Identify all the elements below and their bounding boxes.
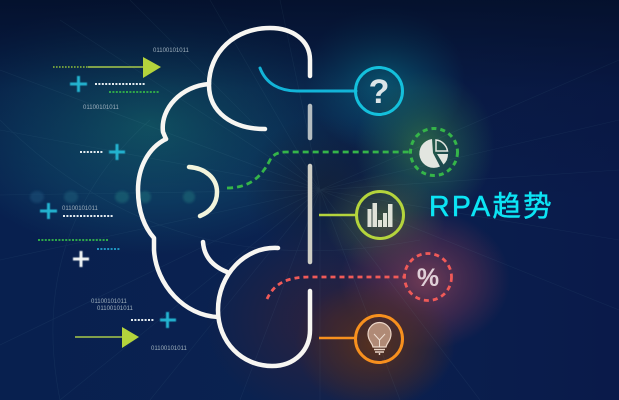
left lobe [138,139,218,317]
small connector fold [203,242,227,272]
binary number labels: 01100101011 [83,105,119,111]
inner fold [189,167,217,216]
binary number labels: 01100101011 [151,346,187,352]
center divider upper [308,106,312,138]
node: question mark: ? [369,73,389,111]
node: bar chart [356,192,404,238]
arrow: top lime [53,57,161,78]
node: light bulb [356,316,402,362]
plus signs [40,76,176,328]
binary number labels: 01100101011 [91,299,127,305]
dotted lines [38,84,160,320]
arrow: bottom lime [75,327,139,348]
node: percent: % [417,264,439,292]
binary number labels [62,48,189,352]
blurred circles row [30,191,195,203]
connector: red dashed line [267,277,404,299]
binary number labels: 01100101011 [62,206,98,212]
top lobe [209,28,310,129]
second lobe [163,84,209,139]
node: pie chart [410,128,458,176]
node: percent [404,254,452,300]
connector: lime line [319,214,356,216]
binary number labels: 01100101011 [153,48,189,54]
connector: cyan line [260,68,356,91]
connector: green dashed line [227,152,410,188]
connector: orange line [319,337,356,339]
node: question mark [356,68,402,114]
binary number labels: 01100101011 [97,306,133,312]
center divider lower [308,166,312,262]
title: RPA趋势 [429,191,554,223]
brain outline [138,28,310,366]
bottom lobe [218,248,310,366]
